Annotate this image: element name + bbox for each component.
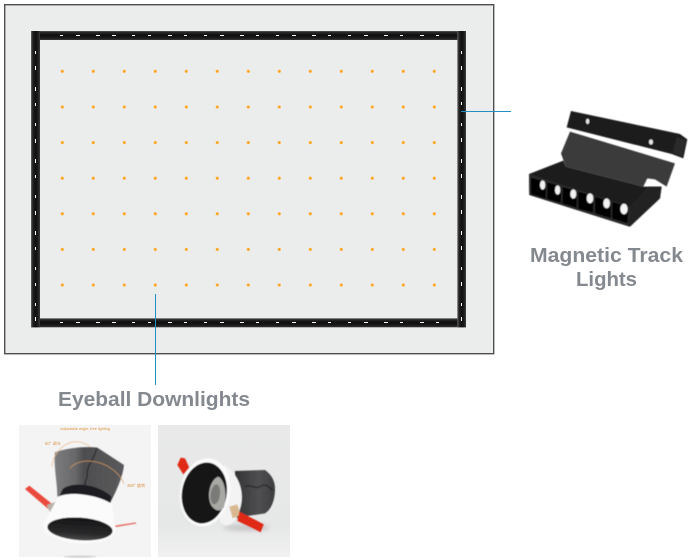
heading: magnetic track lights: Magnetic Track [530,245,684,267]
icon: magnetic track light product [529,111,687,227]
track frame [31,31,466,327]
leader line: magnetic track lights [461,111,511,112]
leader line: eyeball downlights [155,294,156,385]
angle label: 360 degrees: 360° 旋转 [127,482,145,489]
downlight dot grid [60,70,436,287]
photo caption: adjustable angle: Adjustable angle, free lighting [60,427,110,431]
photo: eyeball downlight angle adjustment [19,425,151,558]
photo: eyeball downlight front view [158,425,290,557]
panel: ceiling plan [5,5,494,354]
angle label: 50 degrees: 50° 调节 [45,440,61,447]
heading: magnetic track lights second line: Lights [576,269,637,291]
heading: eyeball downlights: Eyeball Downlights [58,389,250,411]
